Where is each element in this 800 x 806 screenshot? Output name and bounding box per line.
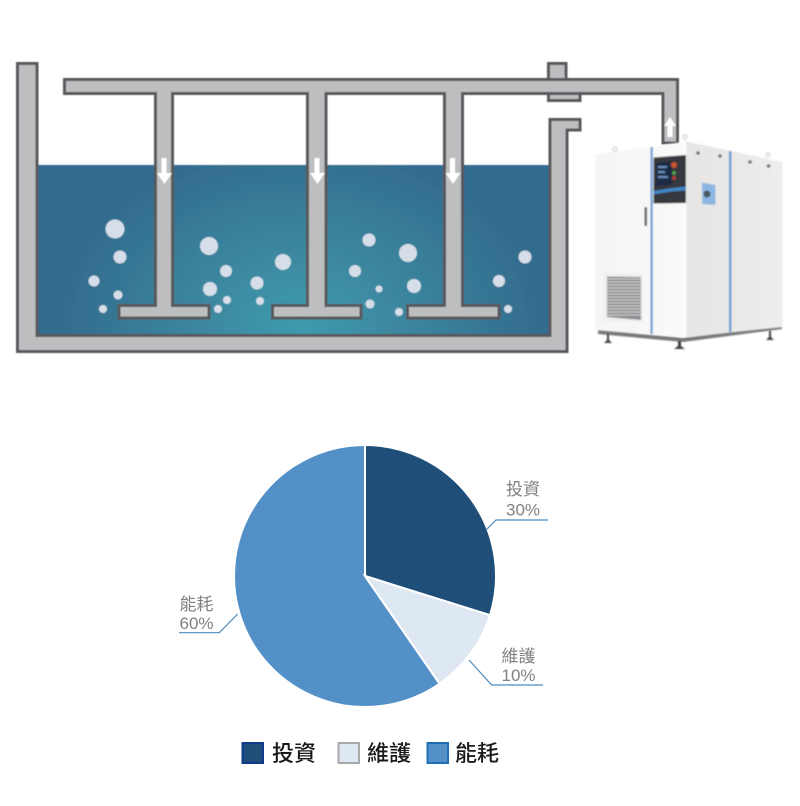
left face	[596, 142, 686, 337]
water body	[38, 165, 549, 336]
callout: 維護 10%	[469, 647, 543, 685]
blue trim stripes	[650, 147, 731, 334]
tank wall	[18, 64, 580, 352]
slice: 能耗 60%	[234, 445, 440, 707]
touch screen	[656, 162, 672, 186]
panel blue band	[654, 186, 686, 194]
pipe flange	[548, 93, 580, 100]
callout: 能耗 60%: 60%	[180, 614, 214, 633]
callout: 能耗 60%: 能耗	[180, 595, 214, 614]
right face	[686, 142, 782, 337]
panel buttons	[671, 162, 677, 168]
legend: 維護: 維護	[367, 736, 411, 768]
callout: 投資 30%: 投資	[506, 480, 540, 499]
blower machine	[596, 135, 782, 349]
vent grille	[604, 273, 643, 322]
top hooks	[613, 135, 770, 157]
control panel	[654, 155, 686, 204]
legend: 能耗: 能耗	[455, 736, 499, 768]
legend	[242, 736, 499, 768]
base and feet	[598, 326, 782, 342]
bolts	[696, 151, 770, 168]
door handle	[644, 207, 647, 226]
side port	[702, 182, 716, 205]
arrows: air flowing down	[157, 158, 460, 184]
air bubbles	[88, 220, 532, 316]
legend: 投資	[242, 736, 316, 768]
arrow: air flowing up from blower	[664, 117, 676, 137]
slice: 投資 30%	[365, 445, 496, 615]
callout: 能耗 60%	[179, 595, 238, 633]
pie chart	[234, 445, 496, 707]
air distribution pipe with drop legs	[64, 80, 678, 318]
callout: 投資 30%	[486, 480, 548, 530]
callout: 投資 30%: 30%	[506, 500, 540, 520]
callout: 維護 10%: 10%	[502, 666, 536, 685]
slice: 維護 10%	[365, 576, 490, 684]
legend: 能耗	[428, 736, 499, 768]
legend: 維護	[338, 736, 411, 768]
callout: 維護 10%: 維護	[502, 647, 536, 666]
aeration tank diagram	[18, 64, 678, 352]
legend: 投資: 投資	[272, 736, 316, 768]
outlet stub on air pipe	[548, 64, 566, 80]
